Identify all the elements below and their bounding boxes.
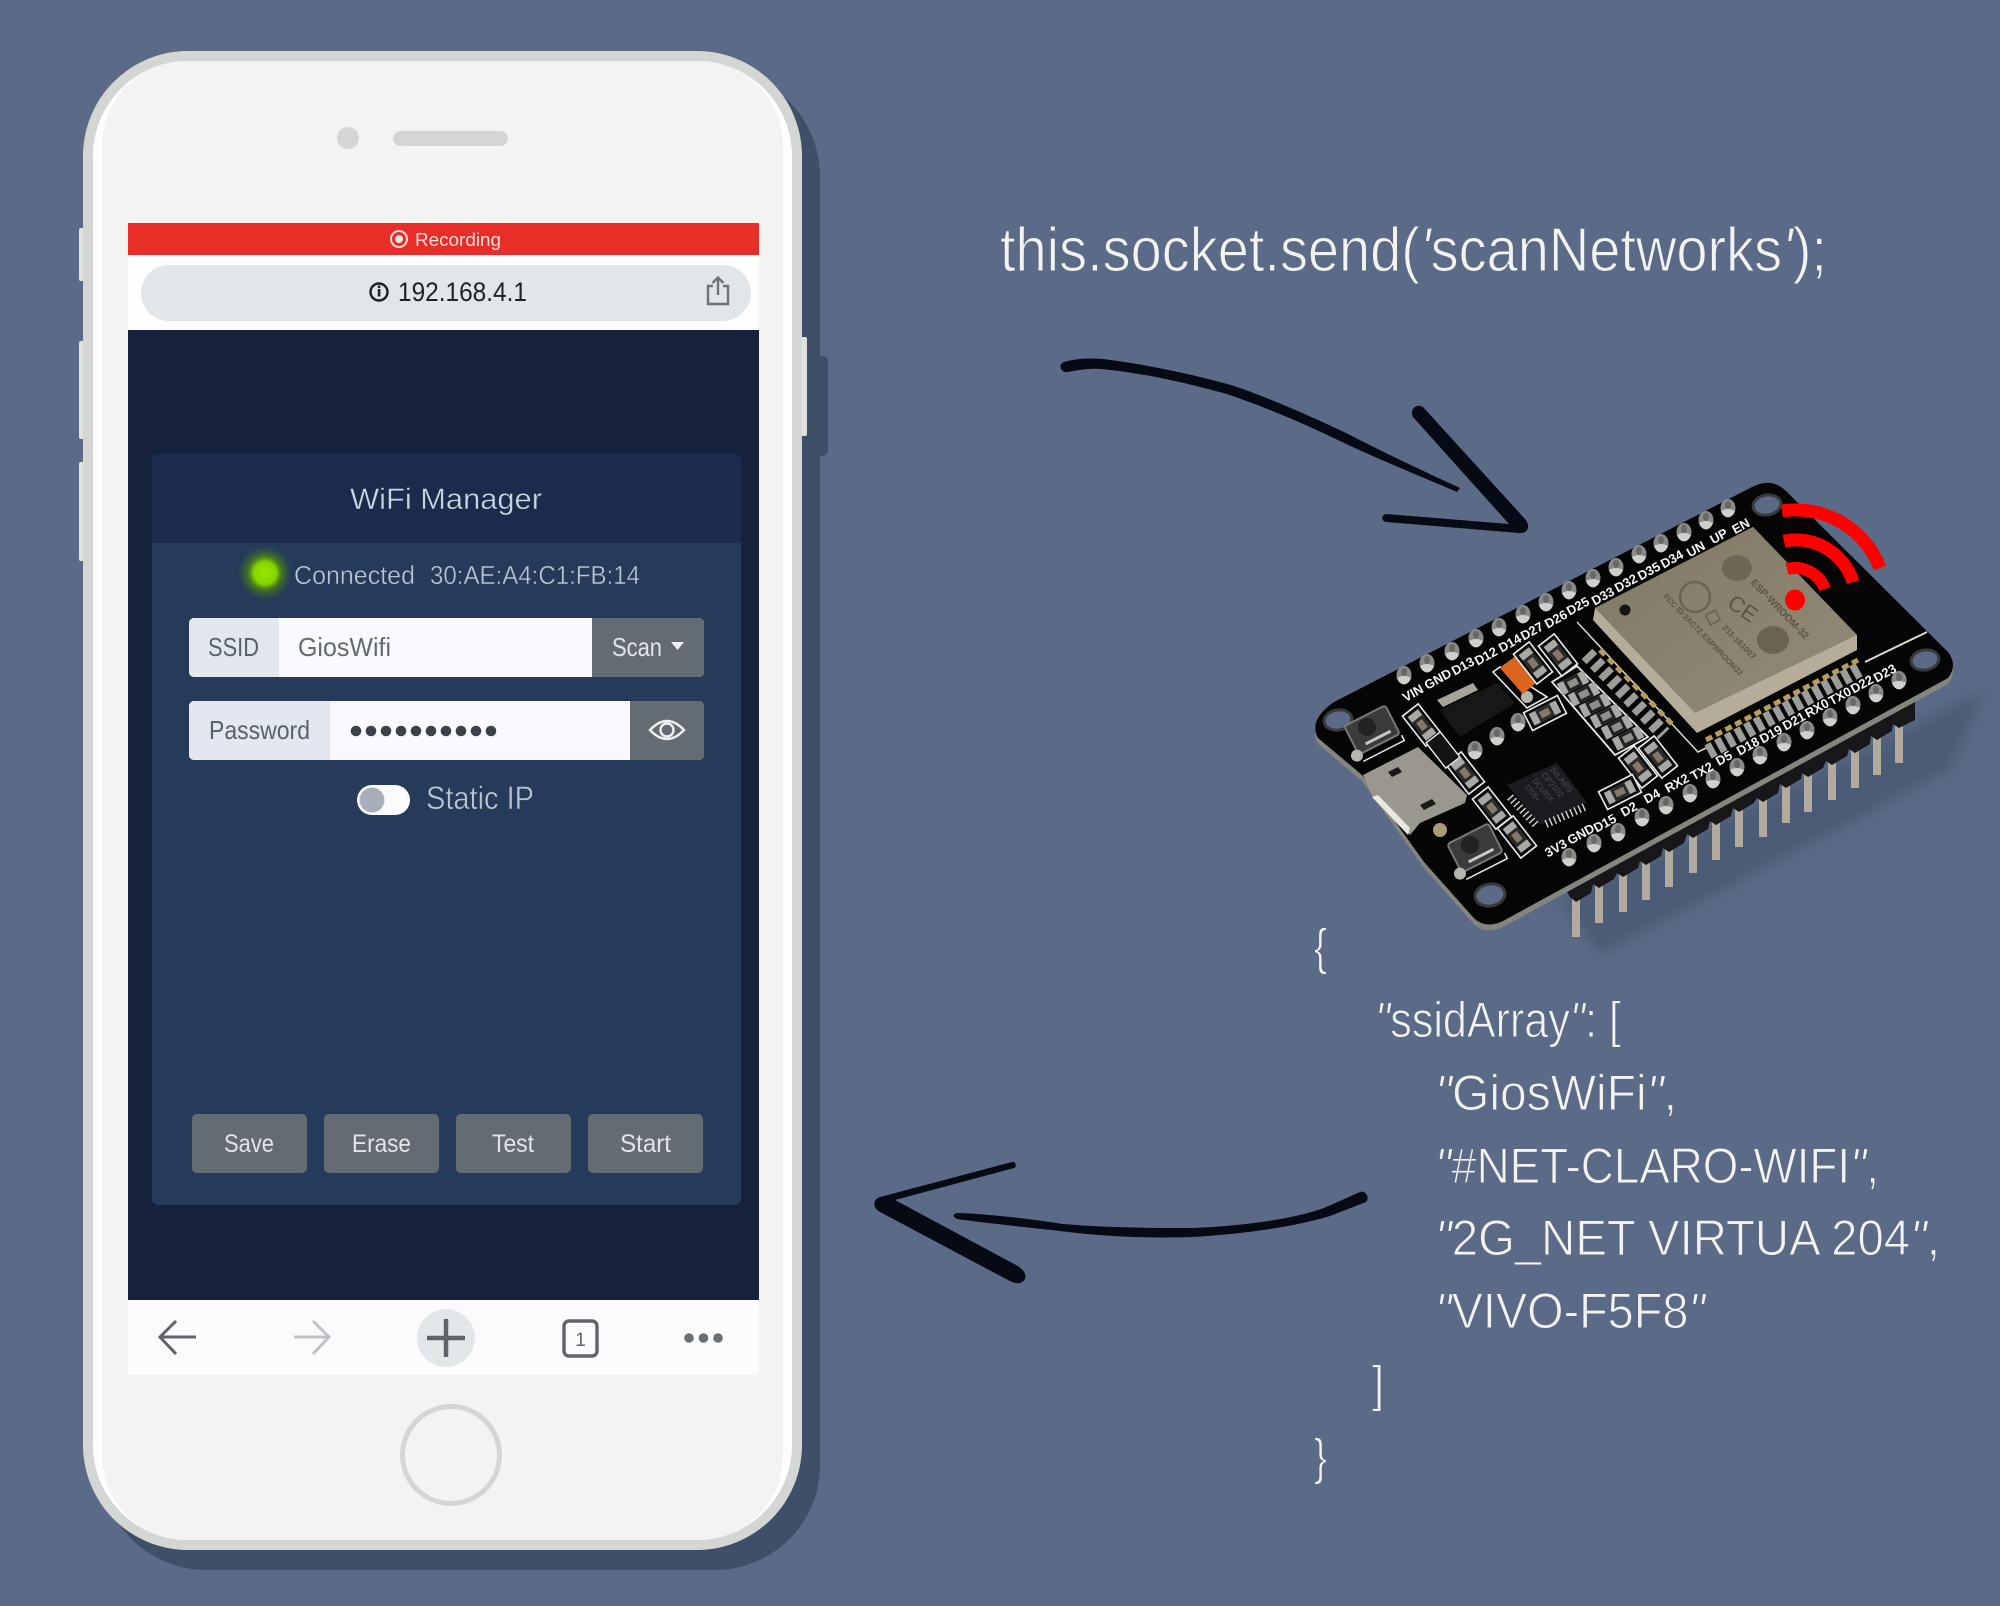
push buttons — [1337, 705, 1507, 883]
top pin labels: D26 — [1542, 607, 1570, 631]
button: start — [588, 1114, 703, 1173]
top pin labels: GND — [1422, 666, 1454, 693]
recording bar: Recording — [415, 230, 501, 250]
bottom pin labels: D15 — [1591, 811, 1619, 835]
password input: Password — [209, 715, 310, 745]
icon: new tab — [417, 1309, 475, 1367]
bottom pin pads — [1562, 671, 1906, 866]
JSON response text: ] — [1372, 1356, 1384, 1412]
header pins — [1576, 718, 1899, 937]
SSID input: Scan — [612, 632, 662, 662]
camera — [337, 127, 359, 149]
password input — [189, 701, 704, 760]
board PCB — [1315, 483, 1953, 925]
diode — [1426, 732, 1460, 768]
module logos — [1680, 555, 1789, 654]
url: 192.168.4.1 — [398, 277, 527, 307]
connection status: Connected — [294, 560, 415, 590]
JSON response text: { — [1314, 919, 1327, 975]
top pin labels: UP — [1707, 525, 1731, 547]
button: erase: Erase — [352, 1130, 411, 1158]
top pin labels — [1400, 515, 1752, 705]
top pin labels: D12 — [1472, 644, 1500, 668]
ESP32 board — [1315, 483, 1985, 955]
mounting holes — [1322, 493, 1941, 908]
arrow: board to phone — [874, 1162, 1368, 1283]
phone body — [83, 51, 802, 1550]
browser toolbar — [128, 1300, 759, 1375]
bottom pin labels: TX0 — [1826, 684, 1854, 708]
connection status — [294, 560, 640, 590]
bottom pin labels: D18 — [1734, 734, 1762, 758]
JSON response text: "2G_NET VIRTUA 204", — [1435, 1210, 1940, 1266]
JSON response text: "GiosWiFi", — [1435, 1065, 1677, 1121]
icon: tab count — [564, 1321, 597, 1356]
module marking: ESP-WROOM-32 — [1748, 577, 1811, 642]
top pin pads — [1396, 499, 1736, 684]
icon: info — [370, 284, 388, 300]
module marking: CE — [1723, 590, 1763, 628]
antenna silk line — [1865, 632, 1927, 662]
voltage regulator — [1437, 683, 1526, 760]
panel header — [152, 454, 741, 543]
orange capacitor — [1493, 657, 1547, 708]
JSON response text: "#NET-CLARO-WIFI", — [1435, 1138, 1879, 1194]
module marking: FCC ID:2AC7Z-ESPWROOM32 — [1662, 592, 1745, 678]
static IP toggle — [357, 780, 534, 816]
static IP toggle: Static IP — [426, 780, 534, 816]
bottom pin labels: D4 — [1641, 785, 1663, 807]
top pin labels: D27 — [1518, 619, 1546, 643]
icon: share — [708, 278, 728, 304]
SMD resistors — [1402, 634, 1678, 858]
bottom pin labels: D5 — [1713, 747, 1735, 769]
icon: forward arrow — [294, 1321, 329, 1354]
JSON response text — [1314, 919, 1940, 1485]
bottom pin labels: D19 — [1757, 722, 1785, 746]
top pin labels: UN — [1684, 538, 1708, 560]
board shadow — [1560, 690, 1985, 955]
side buttons — [79, 228, 807, 561]
top pin labels: D34 — [1658, 546, 1687, 571]
bottom pin labels: D23 — [1871, 661, 1899, 685]
board edge — [1315, 493, 1953, 931]
icon: back arrow — [160, 1321, 196, 1354]
top pin labels: D33 — [1589, 584, 1617, 608]
phone screen — [128, 223, 759, 1375]
address bar — [128, 255, 759, 330]
heading: WiFi Manager — [350, 483, 542, 516]
recording bar — [128, 223, 759, 255]
button: test: Test — [492, 1130, 534, 1158]
phone shadow — [101, 71, 828, 1570]
JSON response text: } — [1314, 1429, 1327, 1485]
icon: eye — [650, 721, 684, 739]
CP2102 chip: 1705+ — [1522, 783, 1542, 804]
top pin labels: D32 — [1612, 571, 1640, 595]
bottom pin labels: D21 — [1780, 709, 1808, 733]
action buttons — [192, 1114, 703, 1173]
top pin labels: VIN — [1400, 681, 1426, 705]
JSON response text: "VIVO-F5F8" — [1435, 1283, 1707, 1339]
module marking — [1662, 577, 1811, 678]
button: start: Start — [620, 1130, 671, 1158]
module castellations — [1587, 650, 1862, 752]
bottom pin labels: GND — [1565, 821, 1597, 848]
icon: red wifi signal — [1782, 510, 1880, 610]
bottom pin labels: D2 — [1618, 798, 1640, 820]
status LED — [238, 546, 292, 600]
icon: tab count: 1 — [575, 1330, 586, 1351]
bottom pin labels: RX0 — [1802, 695, 1832, 721]
ESP-WROOM-32 module — [1593, 527, 1857, 733]
bottom pin labels: TX2 — [1688, 759, 1716, 783]
home button — [402, 1406, 500, 1504]
SMD resistor column — [1552, 666, 1648, 755]
panel: WiFi Manager card — [152, 454, 741, 1205]
SSID input — [189, 618, 704, 677]
top pin labels: D14 — [1496, 630, 1525, 655]
module marking: 211-161007 — [1721, 623, 1758, 661]
password dots — [351, 726, 496, 736]
top pin labels: D35 — [1635, 559, 1663, 583]
top pin labels: D13 — [1449, 654, 1477, 678]
bottom pin labels: RX2 — [1662, 770, 1692, 796]
CP2102 chip: DCL00X — [1530, 777, 1556, 804]
SSID input: SSID — [208, 632, 259, 662]
connection status: 30:AE:A4:C1:FB:14 — [430, 560, 640, 590]
top pin labels: EN — [1729, 515, 1752, 537]
JSON response text: "ssidArray": [ — [1375, 992, 1621, 1048]
module silk outline — [1577, 622, 1706, 752]
arrow: phone to board — [1061, 358, 1528, 533]
header strip — [1560, 690, 1915, 902]
top pin labels: D25 — [1564, 594, 1592, 618]
CP2102 chip: SILABS — [1548, 766, 1575, 794]
CP2102 chip — [1507, 763, 1587, 826]
bottom pin labels: D22 — [1848, 672, 1876, 696]
USB connector — [1363, 747, 1467, 837]
SSID input: GiosWifi — [298, 632, 391, 662]
button: save — [192, 1114, 307, 1173]
screen background — [128, 223, 759, 1375]
bottom pin labels — [1542, 661, 1899, 860]
button: erase — [324, 1114, 439, 1173]
phone — [79, 51, 807, 1550]
button: test — [456, 1114, 571, 1173]
button: save: Save — [224, 1130, 274, 1158]
icon: more — [684, 1333, 723, 1343]
bottom pin labels: 3V3 — [1542, 836, 1570, 860]
CP2102 chip: CP2102 — [1539, 771, 1566, 800]
speaker — [393, 131, 508, 146]
send command text: this.socket.send('scanNetworks'); — [1000, 216, 1827, 285]
